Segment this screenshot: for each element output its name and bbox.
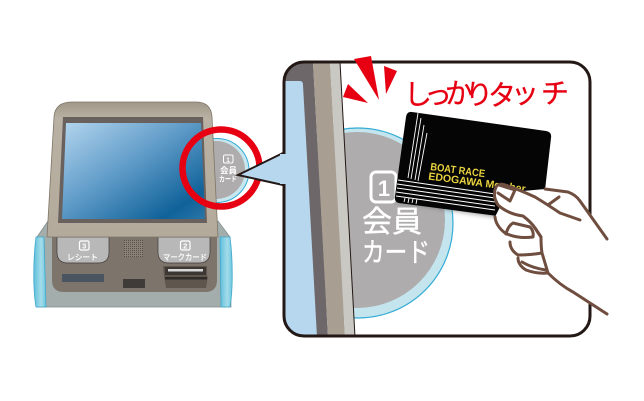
member card bbox=[395, 112, 551, 222]
button: receipt: 3 bbox=[82, 242, 86, 251]
screen edge bbox=[284, 62, 328, 337]
button: receipt bbox=[57, 237, 109, 263]
large touch pad: 1 bbox=[378, 176, 390, 201]
callout pointer bbox=[238, 153, 286, 185]
card stripes bbox=[396, 113, 495, 210]
button: mark card: マークカード bbox=[163, 253, 207, 262]
small touch pad on kiosk: 1 bbox=[226, 157, 230, 164]
kiosk machine bbox=[34, 102, 232, 307]
right side light bbox=[220, 237, 232, 307]
bezel band bbox=[313, 62, 345, 337]
middle finger bbox=[510, 242, 542, 255]
receipt slot bbox=[62, 274, 104, 282]
bezel highlight bbox=[330, 62, 355, 337]
button: mark card: 2 bbox=[183, 242, 187, 251]
large touch pad: 会員 bbox=[362, 206, 422, 239]
large touch pad bbox=[317, 127, 454, 319]
left side light bbox=[34, 237, 46, 307]
small touch pad on kiosk: 会員 bbox=[220, 166, 237, 176]
control panel bbox=[52, 236, 217, 292]
blue screen bbox=[284, 81, 317, 337]
button: receipt: レシート bbox=[67, 253, 98, 262]
small touch pad on kiosk bbox=[185, 138, 249, 202]
upper bezel bbox=[47, 102, 218, 237]
speaker grille bbox=[124, 240, 143, 257]
mark card reader bbox=[163, 266, 208, 288]
thumb nail bbox=[498, 185, 515, 201]
caption: しっかりタッチ bbox=[404, 78, 569, 111]
card text: BOAT RACE bbox=[430, 161, 486, 180]
zoom panel bbox=[263, 62, 590, 337]
index finger bbox=[495, 217, 533, 238]
kiosk base bbox=[37, 221, 231, 307]
hand bbox=[494, 183, 612, 318]
card text: EDOGAWA Member bbox=[428, 171, 526, 195]
centre slot bbox=[123, 279, 145, 288]
red highlight ring bbox=[182, 130, 260, 206]
small touch pad on kiosk: カード bbox=[219, 174, 237, 184]
thumb bbox=[494, 184, 607, 314]
back of hand bbox=[545, 189, 607, 239]
screen frame bbox=[58, 117, 207, 223]
screen bbox=[62, 123, 205, 219]
red emphasis marks bbox=[343, 56, 397, 103]
ring finger bbox=[518, 258, 548, 273]
hand fill bbox=[494, 183, 612, 318]
large touch pad: カード bbox=[362, 238, 430, 268]
palm crease bbox=[548, 197, 559, 205]
button: mark card bbox=[158, 237, 210, 263]
